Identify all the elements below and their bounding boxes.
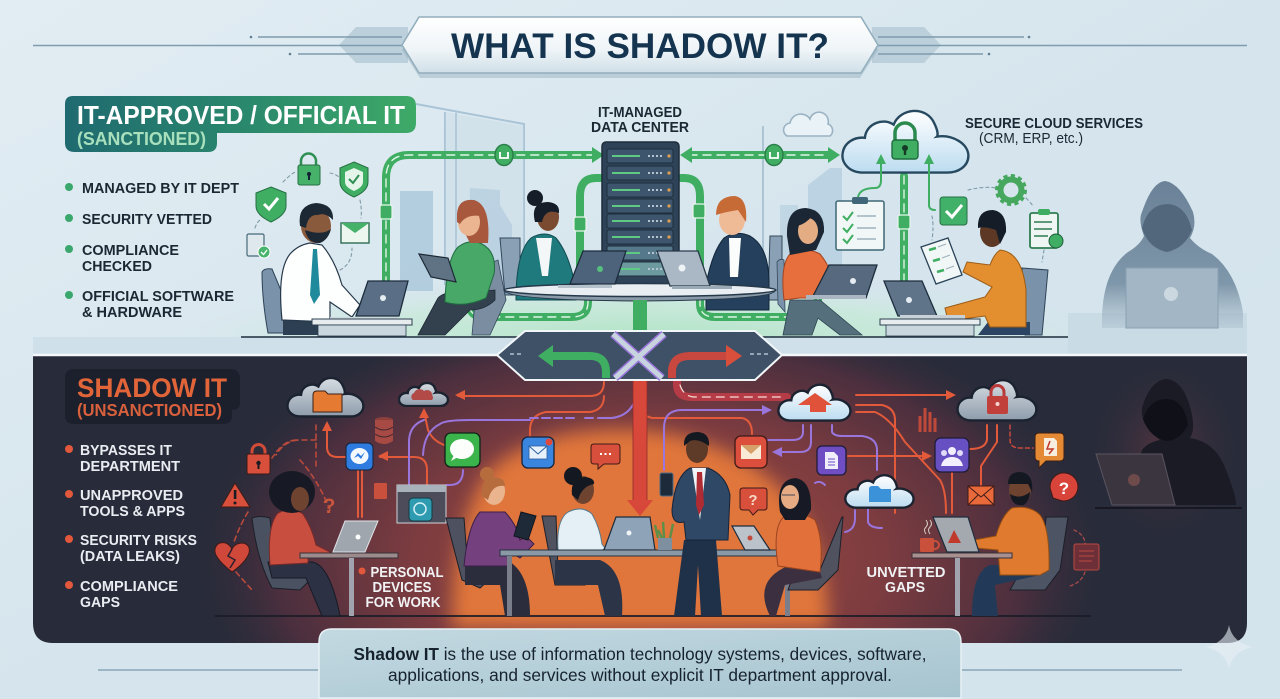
app and warning icons: ? xyxy=(1059,479,1069,498)
list: official IT characteristics: OFFICIAL SOFTWARE xyxy=(82,289,234,305)
person: woman in orange top xyxy=(777,208,862,335)
panel: official IT xyxy=(33,96,1247,356)
laptop: teal blazer xyxy=(558,251,626,288)
person: man in white shirt xyxy=(262,203,360,335)
list: shadow IT characteristics: COMPLIANCE xyxy=(80,579,178,595)
person: bearded man in orange xyxy=(972,472,1068,616)
label: data center: DATA CENTER xyxy=(591,120,690,136)
person: woman with glasses xyxy=(764,478,843,616)
laptop: navy blazer xyxy=(657,251,732,289)
person: woman with tablet xyxy=(418,200,506,335)
person: woman in teal blazer xyxy=(500,190,576,300)
heading: IT-approved xyxy=(65,96,416,152)
label: secure cloud services xyxy=(965,116,1143,147)
icon: plant xyxy=(655,522,673,550)
heading: IT-approved: IT-APPROVED / OFFICIAL IT xyxy=(77,100,405,130)
laptop and desk: left xyxy=(312,281,412,336)
app and warning icons: ? xyxy=(748,492,758,509)
server rack: data center xyxy=(602,142,679,292)
title banner xyxy=(33,17,1247,78)
green connection pipes xyxy=(386,147,904,317)
label: secure cloud services: SECURE CLOUD SERVICES xyxy=(965,116,1143,132)
list: shadow IT characteristics: DEPARTMENT xyxy=(80,459,180,475)
callout: definition xyxy=(319,629,961,698)
heading: IT-approved: (SANCTIONED) xyxy=(77,129,206,149)
laptop and desk: right xyxy=(880,281,980,336)
round meeting table xyxy=(504,284,776,332)
panel background xyxy=(33,355,1247,643)
icon: sparkle xyxy=(1206,625,1252,669)
label: personal devices for work: FOR WORK xyxy=(366,595,441,611)
list: shadow IT characteristics xyxy=(65,443,197,611)
icons: checklist and approvals xyxy=(836,154,1063,262)
app and warning icons: ? xyxy=(323,495,335,518)
person: woman with afro xyxy=(252,471,340,616)
list: shadow IT characteristics: BYPASSES IT xyxy=(80,443,172,459)
list: official IT characteristics xyxy=(65,181,239,321)
label: unvetted gaps xyxy=(866,565,946,596)
list: official IT characteristics: & HARDWARE xyxy=(82,305,182,321)
title banner: WHAT IS SHADOW IT? xyxy=(451,27,829,66)
security icons left xyxy=(247,154,369,270)
list: official IT characteristics: MANAGED BY IT DEPT xyxy=(82,181,239,197)
label: data center: IT-MANAGED xyxy=(598,105,682,121)
label: personal devices for work: DEVICES xyxy=(372,580,432,596)
pipe lock badges xyxy=(380,144,910,231)
label: unvetted gaps: UNVETTED xyxy=(866,565,946,581)
icon: coffee mug xyxy=(920,520,939,552)
panel: shadow IT xyxy=(33,355,1247,643)
app and warning icons xyxy=(215,408,1099,572)
unsanctioned data flows xyxy=(234,382,1085,590)
bottom divider lines xyxy=(98,669,1182,671)
clouds: unsanctioned services xyxy=(287,378,1036,508)
list: official IT characteristics: CHECKED xyxy=(82,259,152,275)
person: standing man in suit xyxy=(660,432,730,616)
person: woman in white blazer xyxy=(542,467,622,616)
laptop and desk: afro xyxy=(300,521,398,616)
floor line xyxy=(241,336,1068,338)
list: shadow IT characteristics: (DATA LEAKS) xyxy=(80,549,180,565)
heading: shadow IT: (UNSANCTIONED) xyxy=(77,400,222,420)
laptop and desk: bearded man xyxy=(912,517,1012,616)
label: data center xyxy=(591,105,690,136)
laptop: white blazer xyxy=(604,517,655,550)
big red downward arrow xyxy=(627,380,653,516)
list: official IT characteristics: COMPLIANCE xyxy=(82,243,179,259)
callout: definition: Shadow IT is the use of information technology systems, devices, software, xyxy=(354,644,926,664)
person: man with clipboard xyxy=(921,210,1048,335)
label: secure cloud services: (CRM, ERP, etc.) xyxy=(979,131,1083,147)
figure: dark hooded hacker xyxy=(1095,379,1242,508)
heading: shadow IT xyxy=(65,369,240,424)
icon: secure cloud xyxy=(842,111,968,173)
list: shadow IT characteristics: UNAPPROVED xyxy=(80,488,183,504)
laptop: orange top xyxy=(806,265,877,299)
list: shadow IT characteristics: TOOLS & APPS xyxy=(80,504,185,520)
office backdrop xyxy=(33,104,1247,356)
person: woman in purple xyxy=(446,467,536,616)
list: shadow IT characteristics: SECURITY RISKS xyxy=(80,533,197,549)
figure: faded hooded observer xyxy=(1102,181,1243,328)
list: shadow IT characteristics: GAPS xyxy=(80,595,120,611)
list: official IT characteristics: SECURITY VETTED xyxy=(82,212,212,228)
label: personal devices for work xyxy=(358,565,444,611)
laptop: glasses xyxy=(732,526,770,550)
label: unvetted gaps: GAPS xyxy=(885,580,925,596)
center switch: official vs shadow routing xyxy=(497,331,782,380)
heading: shadow IT: SHADOW IT xyxy=(77,373,227,403)
callout: definition: applications, and services without explicit IT department approval. xyxy=(388,665,892,685)
person: man in navy blazer xyxy=(706,196,782,310)
long table xyxy=(500,550,795,616)
label: personal devices for work: PERSONAL xyxy=(370,565,444,581)
